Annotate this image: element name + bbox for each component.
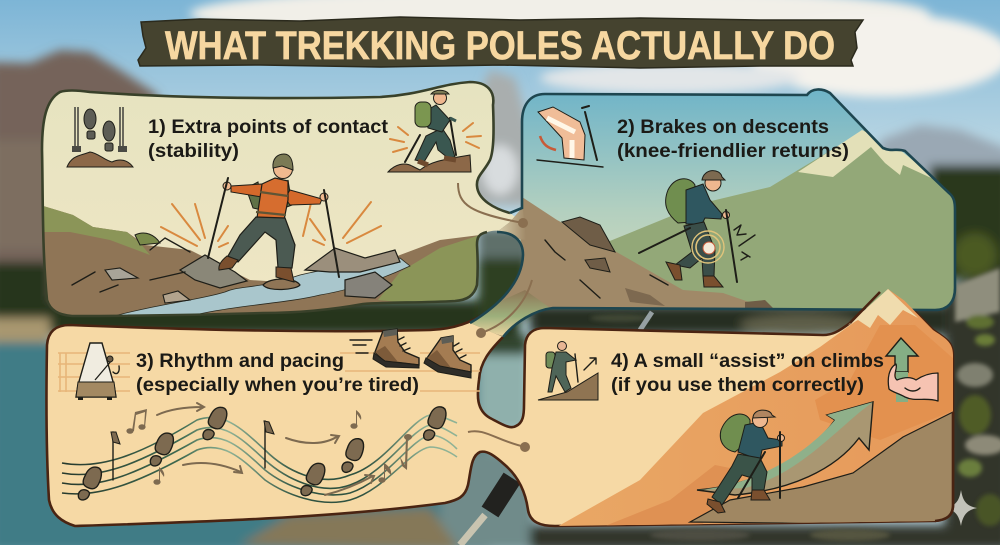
icon: small hiker on rocks xyxy=(388,90,481,172)
heading 4 xyxy=(611,351,884,396)
panel outline reinforcement on panel 4 right edge xyxy=(935,412,953,521)
icon: small climber xyxy=(538,342,598,400)
scene: rocky stream crossing xyxy=(40,205,480,322)
icon: knee joint and pole xyxy=(537,106,603,167)
icon: footprints with poles xyxy=(67,107,133,167)
rhythm arrows xyxy=(157,403,374,495)
music notes and motion arrows xyxy=(126,409,412,485)
connector lines between steps xyxy=(458,183,532,451)
heading 2 xyxy=(617,117,849,162)
hiker descending xyxy=(639,171,755,287)
footprints xyxy=(77,404,447,503)
big ascent arrow xyxy=(697,402,873,495)
icon: metronome xyxy=(76,343,119,400)
icon: flexed arm with up arrow xyxy=(886,338,938,402)
climbing hiker xyxy=(707,410,784,513)
main hiker crossing stream xyxy=(208,154,339,282)
heading 3 xyxy=(136,351,419,396)
heading 3: (especially when you’re tired) xyxy=(136,375,419,396)
wavy staff of footsteps xyxy=(62,415,457,502)
scene: mountain and descent slope xyxy=(465,130,960,340)
scene: orange mountain and slope xyxy=(555,289,960,528)
rays of stability xyxy=(161,202,381,247)
panel 1: extra points of contact xyxy=(40,82,522,322)
icon: AI sparkle watermark xyxy=(945,490,977,526)
heading 2: (knee-friendlier returns) xyxy=(617,141,849,162)
heading 1: 1) Extra points of contact xyxy=(148,117,389,138)
heading 3: 3) Rhythm and pacing xyxy=(136,351,344,372)
music staff lines xyxy=(58,353,480,392)
panel 4 contents: assist on climbs xyxy=(538,289,960,528)
heading 4: (if you use them correctly) xyxy=(611,375,864,396)
panel 3 and 4 base shape xyxy=(46,289,953,526)
panel 2: brakes on descents xyxy=(465,89,960,340)
icon: hiking boots xyxy=(350,329,471,378)
panel 3 contents: rhythm and pacing xyxy=(58,329,480,503)
heading 4: 4) A small “assist” on climbs xyxy=(611,351,884,372)
heading 1 xyxy=(148,117,389,162)
heading 1: (stability) xyxy=(148,141,239,162)
title banner: WHAT TREKKING POLES ACTUALLY DO xyxy=(165,24,835,68)
trekking pole marks xyxy=(111,421,274,480)
heading 2: 2) Brakes on descents xyxy=(617,117,829,138)
